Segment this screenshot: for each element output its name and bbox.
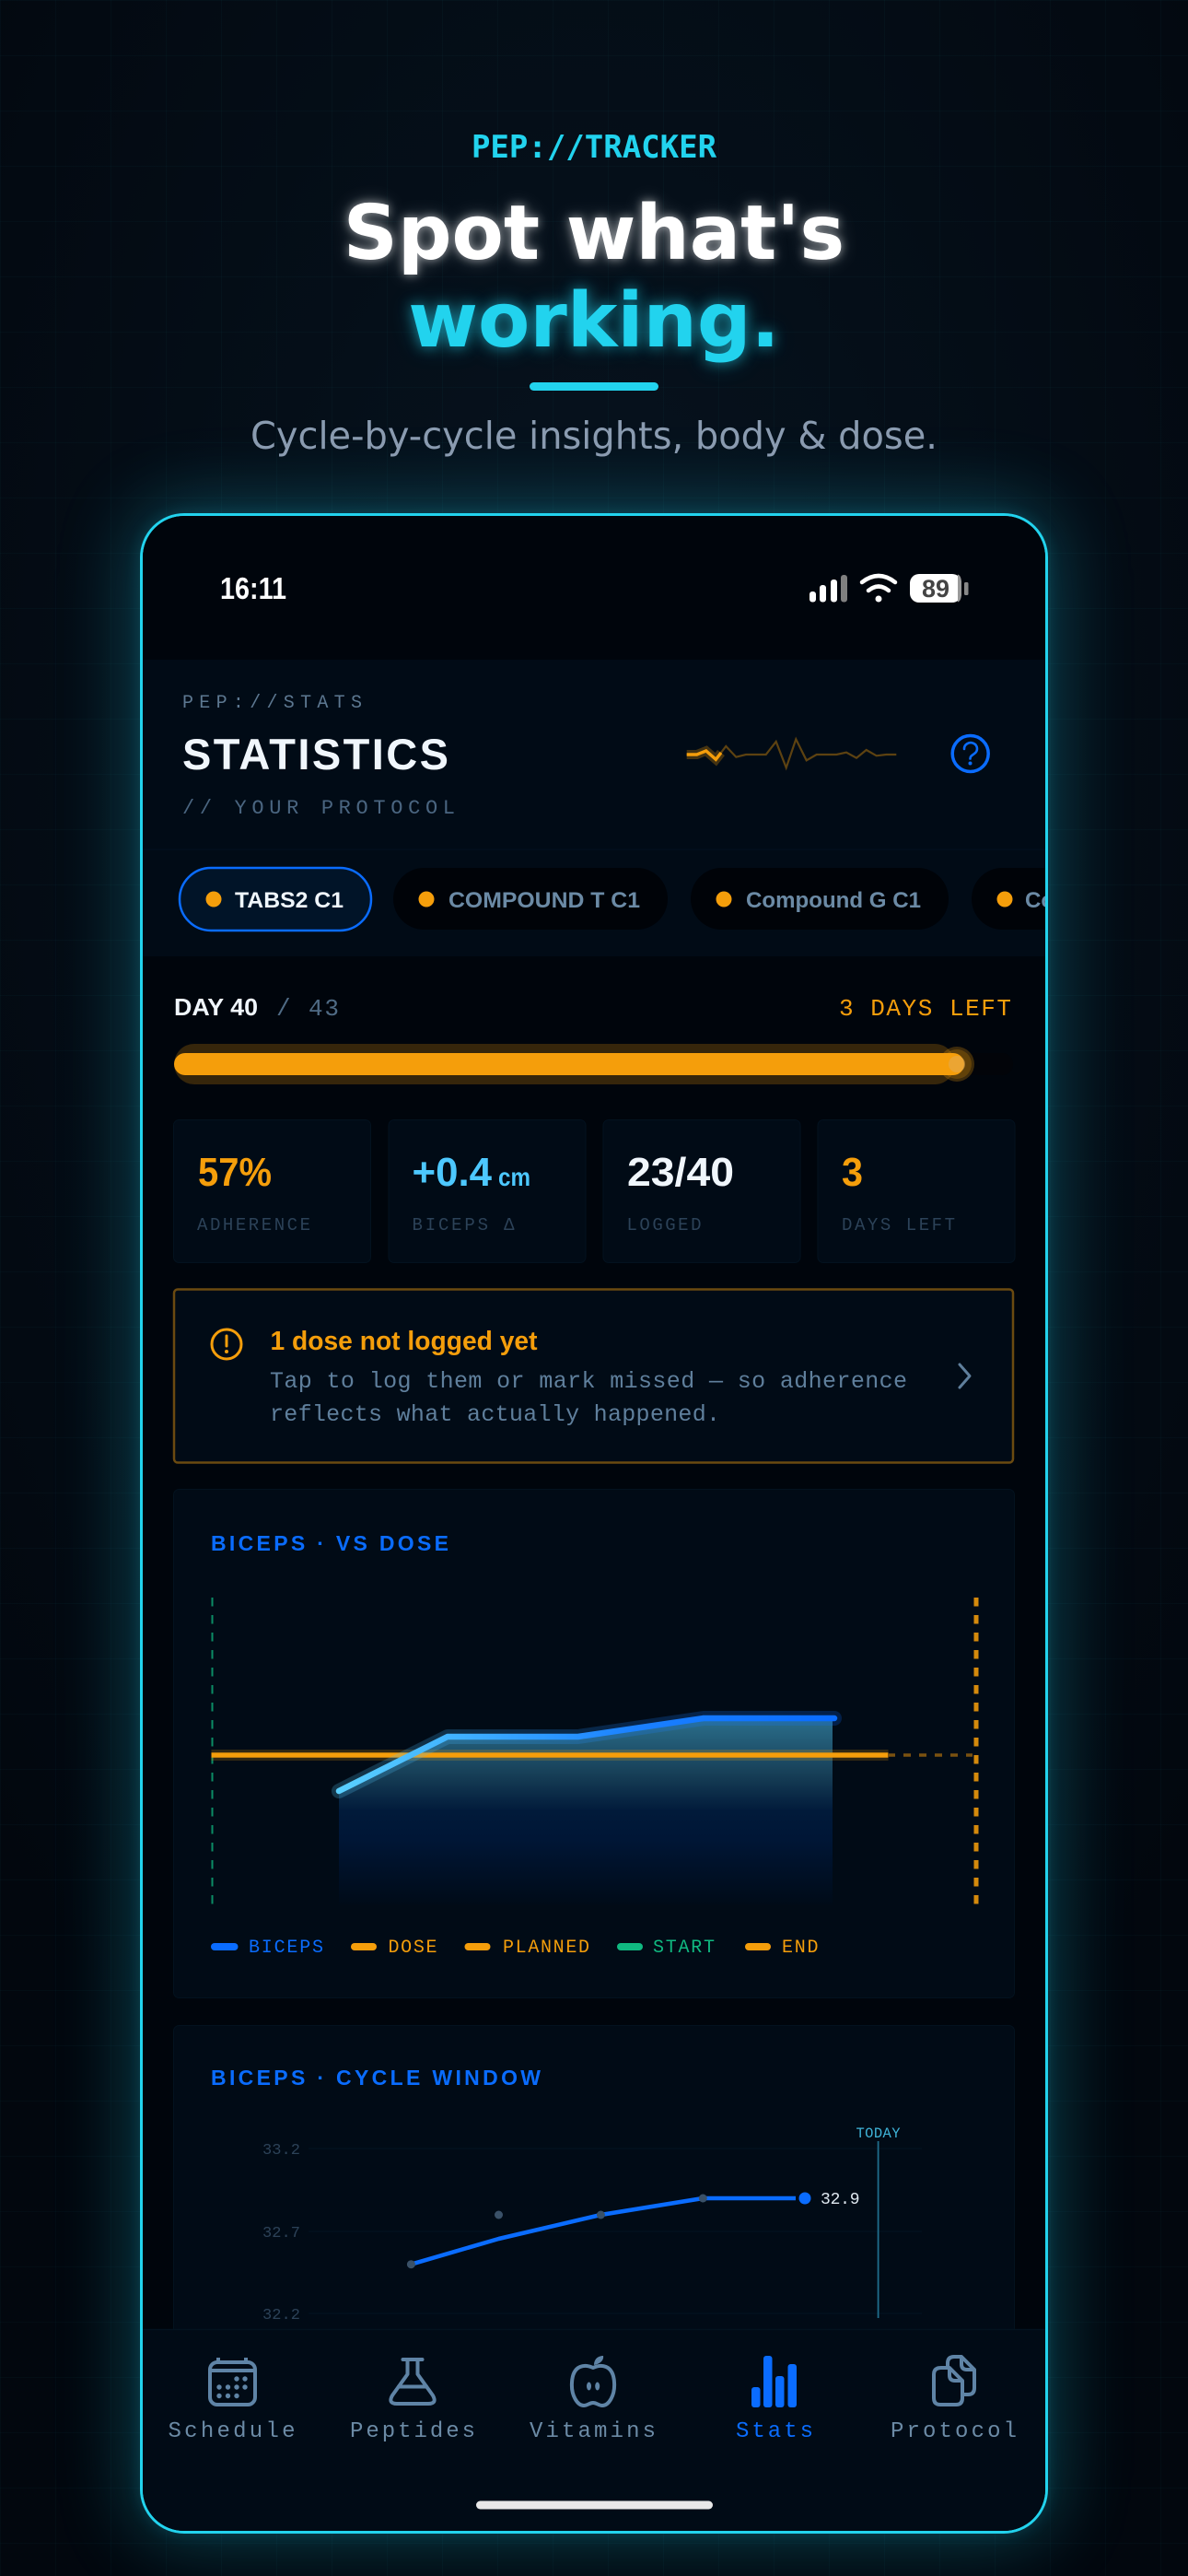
card: days left: DAYS LEFT [842,1215,955,1235]
heading: STATISTICS [182,730,448,779]
eyebrow: PEP://STATS [182,693,362,714]
tab: peptides [350,2359,475,2444]
panel: biceps vs dose [173,1489,1015,1997]
chip: active: TABS2 C1 [235,888,344,913]
legend: DOSE [389,1938,437,1959]
icon: wifi [862,576,895,603]
panel: stats header [143,660,1045,956]
chart title: BICEPS · VS DOSE [211,1531,448,1555]
chip: clipped [972,868,1045,930]
tab: stats active [736,2356,813,2444]
day counter: DAY 40 [174,993,258,1021]
callout body: Tap to log them or mark missed — so adherence [270,1368,907,1395]
legend [211,1940,818,1952]
card: adherence [173,1120,370,1262]
callout body: reflects what actually happened. [270,1401,720,1428]
line chart: 32.9 [821,2191,860,2209]
panel: biceps cycle window [173,2025,1015,2329]
chip: active [180,868,371,931]
day total number: 43 [309,995,339,1023]
card: logged: LOGGED [626,1215,702,1235]
tab: vitamins [530,2356,656,2444]
bottom navigation [143,2329,1045,2534]
progress row [174,993,1013,1084]
tab: peptides: Peptides [350,2419,475,2444]
accent bar [530,382,658,391]
header block [250,129,938,458]
stat cards [173,1120,1015,1262]
tab: vitamins: Vitamins [530,2419,656,2444]
subtitle: Cycle-by-cycle insights, body & dose. [250,414,938,458]
clock: 16:11 [220,571,286,605]
sparkline [687,739,896,767]
callout title: 1 dose not logged yet [271,1327,538,1356]
home indicator [476,2500,713,2510]
title: Spot what's [344,190,844,277]
tab: schedule: Schedule [168,2419,295,2444]
tab: protocol [891,2357,1017,2444]
eyebrow: PEP://TRACKER [472,129,717,166]
status bar [143,516,1045,603]
y axis labels: 33.2 [262,2142,300,2160]
icon: alert [212,1329,241,1359]
line chart [212,1598,976,1904]
card: adherence: ADHERENCE [197,1215,310,1235]
subheading: // YOUR PROTOCOL [182,797,455,820]
y axis labels [262,2142,300,2324]
icon: battery [910,574,969,603]
progress bar [174,1044,1013,1084]
legend: BICEPS [249,1938,323,1959]
phone screen [143,516,1045,2531]
phone frame [140,513,1048,2534]
day total: / [276,995,291,1023]
tab: schedule [168,2358,295,2444]
chart title: BICEPS · CYCLE WINDOW [211,2066,541,2090]
card: logged [603,1120,800,1262]
y axis labels: 32.2 [262,2307,300,2324]
legend: PLANNED [503,1938,589,1959]
line chart [309,2125,922,2318]
card: days left: 3 [842,1150,863,1195]
chip: compound t [393,868,668,930]
icon: chevron [960,1364,970,1388]
tab: stats active: Stats [736,2419,813,2444]
days left: 3 DAYS LEFT [839,995,1011,1023]
line chart: TODAY [856,2125,901,2142]
card: biceps delta: +0.4 [413,1150,493,1195]
chip: compound g: Compound G C1 [746,888,921,913]
tab: protocol: Protocol [891,2419,1017,2444]
card: days left [818,1120,1015,1262]
y axis labels: 32.7 [262,2225,300,2242]
chip: compound t: COMPOUND T C1 [448,888,640,913]
card: biceps delta: cm [498,1163,530,1191]
card: adherence: 57% [198,1150,272,1195]
icon: battery: 89 [922,575,949,603]
legend: END [782,1938,818,1959]
card: biceps delta: BICEPS Δ [413,1215,515,1235]
card: logged: 23/40 [627,1150,734,1195]
legend: START [653,1938,715,1959]
chip: clipped: Compound [1025,888,1142,913]
card: biceps delta [389,1120,586,1262]
callout body [270,1368,907,1428]
callout: dose not logged [174,1290,1013,1463]
title: working. [408,277,780,365]
icon: signal [809,575,847,603]
chip: compound g [691,868,949,930]
title [341,190,849,374]
icon: help [952,735,988,772]
